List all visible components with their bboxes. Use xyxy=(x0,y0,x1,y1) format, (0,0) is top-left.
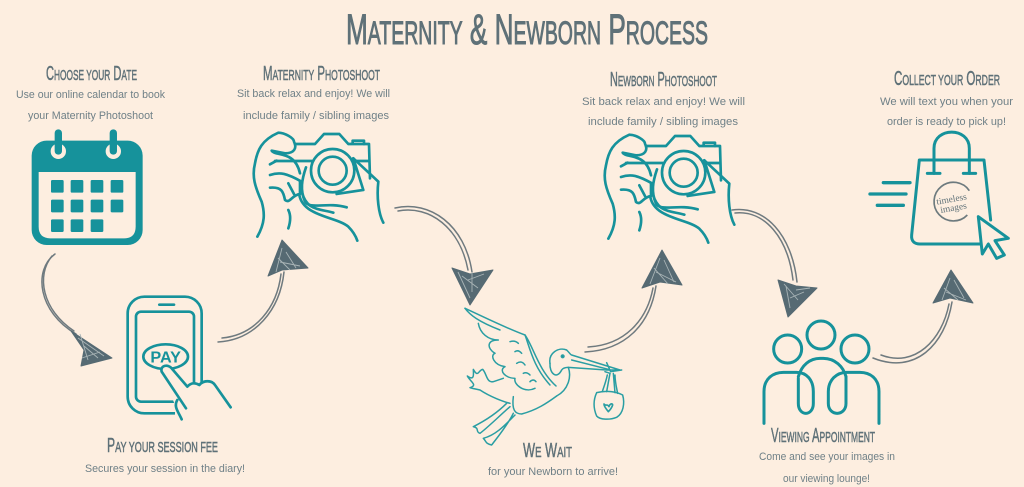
text: collect description: order is ready to pick up! xyxy=(887,116,1006,128)
text: viewing description: our viewing lounge! xyxy=(783,473,870,485)
text: collect description: We will text you when your xyxy=(880,96,1013,108)
step: choose your date xyxy=(16,63,165,245)
arrow: maternity photoshoot to wait xyxy=(395,207,493,305)
text: newborn description: include family / sibling images xyxy=(588,116,739,128)
heading: maternity photoshoot: MATERNITY PHOTOSHOOT xyxy=(263,63,380,85)
icon: hands holding camera xyxy=(605,135,734,243)
text: maternity description: Sit back relax and enjoy! We will xyxy=(237,88,390,100)
heading: choose your date: CHOOSE YOUR DATE xyxy=(46,63,137,85)
logo: timeless images xyxy=(934,182,969,221)
heading: newborn photoshoot: NEWBORN PHOTOSHOOT xyxy=(610,69,717,91)
text: choose your date description: Use our online calendar to book xyxy=(16,89,165,101)
icon: stork carrying bag xyxy=(465,308,624,445)
icon: phone payment: PAY xyxy=(150,350,182,367)
icon: calendar xyxy=(32,129,143,245)
step: collect your order xyxy=(870,68,1013,258)
heading: we wait: WE WAIT xyxy=(523,440,572,462)
text: pay description: Secures your session in the diary! xyxy=(85,463,245,475)
heading: viewing appointment: VIEWING APPOINTMENT xyxy=(771,425,875,447)
step: we wait xyxy=(465,308,624,478)
heading: pay your session fee: PAY YOUR SESSION FEE xyxy=(107,435,218,457)
step: maternity photoshoot xyxy=(237,63,390,241)
icon: hands holding camera xyxy=(254,133,383,241)
text: maternity description: include family / sibling images xyxy=(243,110,389,122)
arrow: payment to maternity photoshoot xyxy=(218,240,308,342)
step: newborn photoshoot xyxy=(582,69,745,243)
icon: phone payment xyxy=(128,297,231,420)
arrow: date to payment xyxy=(42,254,112,366)
logo: timeless images: images xyxy=(940,201,968,216)
arrow: newborn photoshoot to viewing xyxy=(732,209,817,317)
arrow: wait to newborn photoshoot xyxy=(585,250,682,352)
text: newborn description: Sit back relax and enjoy! We will xyxy=(582,96,745,108)
text: choose your date description: your Maternity Photoshoot xyxy=(28,110,153,122)
text: viewing description: Come and see your images in xyxy=(759,451,895,463)
step: viewing appointment xyxy=(759,321,895,485)
arrow: viewing to collect xyxy=(873,270,973,363)
title: MATERNITY & NEWBORN PROCESS xyxy=(346,6,708,54)
logo: timeless images: timeless xyxy=(936,192,968,208)
text: wait description: for your Newborn to arrive! xyxy=(488,466,618,478)
heading: collect your order: COLLECT YOUR ORDER xyxy=(894,68,1000,90)
icon: shopping bag with cursor xyxy=(870,132,1008,258)
icon: three people xyxy=(764,321,879,423)
step: pay session fee xyxy=(85,297,245,475)
